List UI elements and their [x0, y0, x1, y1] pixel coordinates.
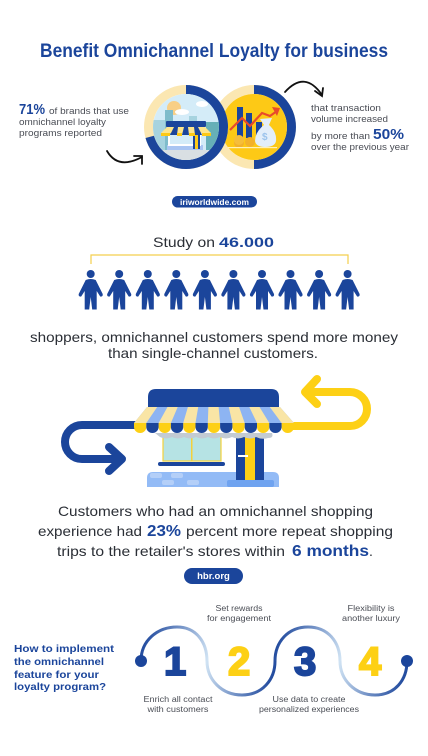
paragraph: repeat shopping: .: [369, 543, 373, 559]
study text: than single-channel customers.: [108, 345, 318, 361]
step labels: for engagement: [207, 614, 272, 623]
text: 71% of brands: programs reported: [19, 128, 102, 139]
study text: [30, 329, 398, 361]
step numbers: 3: [294, 640, 316, 684]
step labels: with customers: [146, 705, 208, 714]
paragraph: repeat shopping: Customers who had an omnichannel shopping: [58, 503, 373, 519]
source pill: hbr.org: hbr.org: [197, 571, 230, 582]
text: 71% of brands: omnichannel loyalty: [19, 117, 106, 128]
window: [163, 434, 221, 461]
awning shadow: [155, 433, 272, 439]
text: transaction volume: that transaction: [311, 103, 381, 114]
step labels: Use data to create: [272, 695, 346, 704]
bracket: [91, 255, 348, 264]
source pill: hbr.org: [184, 568, 243, 584]
study text: shoppers, omnichannel customers spend more money: [30, 329, 398, 345]
arrow: left curved: [107, 151, 142, 164]
paragraph: repeat shopping: experience had: [38, 523, 142, 539]
heading: how to implement: loyalty program?: [14, 681, 106, 693]
title: Benefit Omnichannel Loyalty for business: [40, 41, 388, 62]
store illustration: [134, 389, 294, 487]
paragraph: repeat shopping: 6 months: [292, 543, 369, 560]
paragraph: repeat shopping: [38, 503, 393, 560]
study heading: Study on: [153, 234, 215, 250]
people row: [79, 270, 360, 310]
text: 71% of brands: 71%: [19, 101, 45, 118]
step labels: another luxury: [342, 614, 400, 623]
heading: how to implement: feature for your: [14, 669, 99, 681]
heading: how to implement: How to implement: [14, 643, 115, 655]
text: transaction volume: by more than: [311, 131, 370, 142]
heading: how to implement: the omnichannel: [14, 656, 104, 668]
text: transaction volume: 50%: [373, 126, 404, 143]
icon: money and chart circle: $: [262, 132, 268, 143]
text: transaction volume: [311, 103, 409, 153]
text: transaction volume: volume increased: [311, 114, 388, 125]
heading: how to implement: [14, 643, 115, 693]
step numbers: 4: [359, 640, 382, 684]
step labels: personalized experiences: [259, 705, 359, 714]
paragraph: repeat shopping: percent more repeat shopping: [186, 523, 393, 539]
step numbers: 1: [164, 640, 186, 684]
wave path: [135, 627, 413, 695]
paragraph: repeat shopping: trips to the retailer's stores within: [57, 543, 285, 559]
roof: [148, 389, 279, 407]
study heading: [153, 234, 274, 250]
door: [236, 433, 264, 480]
arrow: yellow return: [292, 379, 367, 426]
arrow: right curved: [285, 82, 323, 96]
step labels: Enrich all contact: [144, 695, 213, 704]
text: 71% of brands: of brands that use: [49, 106, 129, 117]
awning: [134, 407, 294, 423]
text: 71% of brands: [19, 101, 129, 139]
ground: [147, 472, 279, 487]
text: transaction volume: over the previous year: [311, 142, 409, 153]
icon: store circle: [146, 85, 228, 169]
source pill: iriworldwide.com: iriworldwide.com: [180, 197, 249, 207]
paragraph: repeat shopping: 23%: [147, 523, 181, 540]
study heading: 46.000: [219, 234, 274, 250]
step numbers: 2: [228, 640, 250, 684]
step labels: [144, 604, 400, 714]
step numbers: [164, 640, 382, 684]
step labels: Flexibility is: [348, 604, 394, 613]
arrow: blue return: [65, 425, 136, 471]
step labels: Set rewards: [216, 604, 262, 613]
icon: money and chart circle: [216, 85, 296, 169]
